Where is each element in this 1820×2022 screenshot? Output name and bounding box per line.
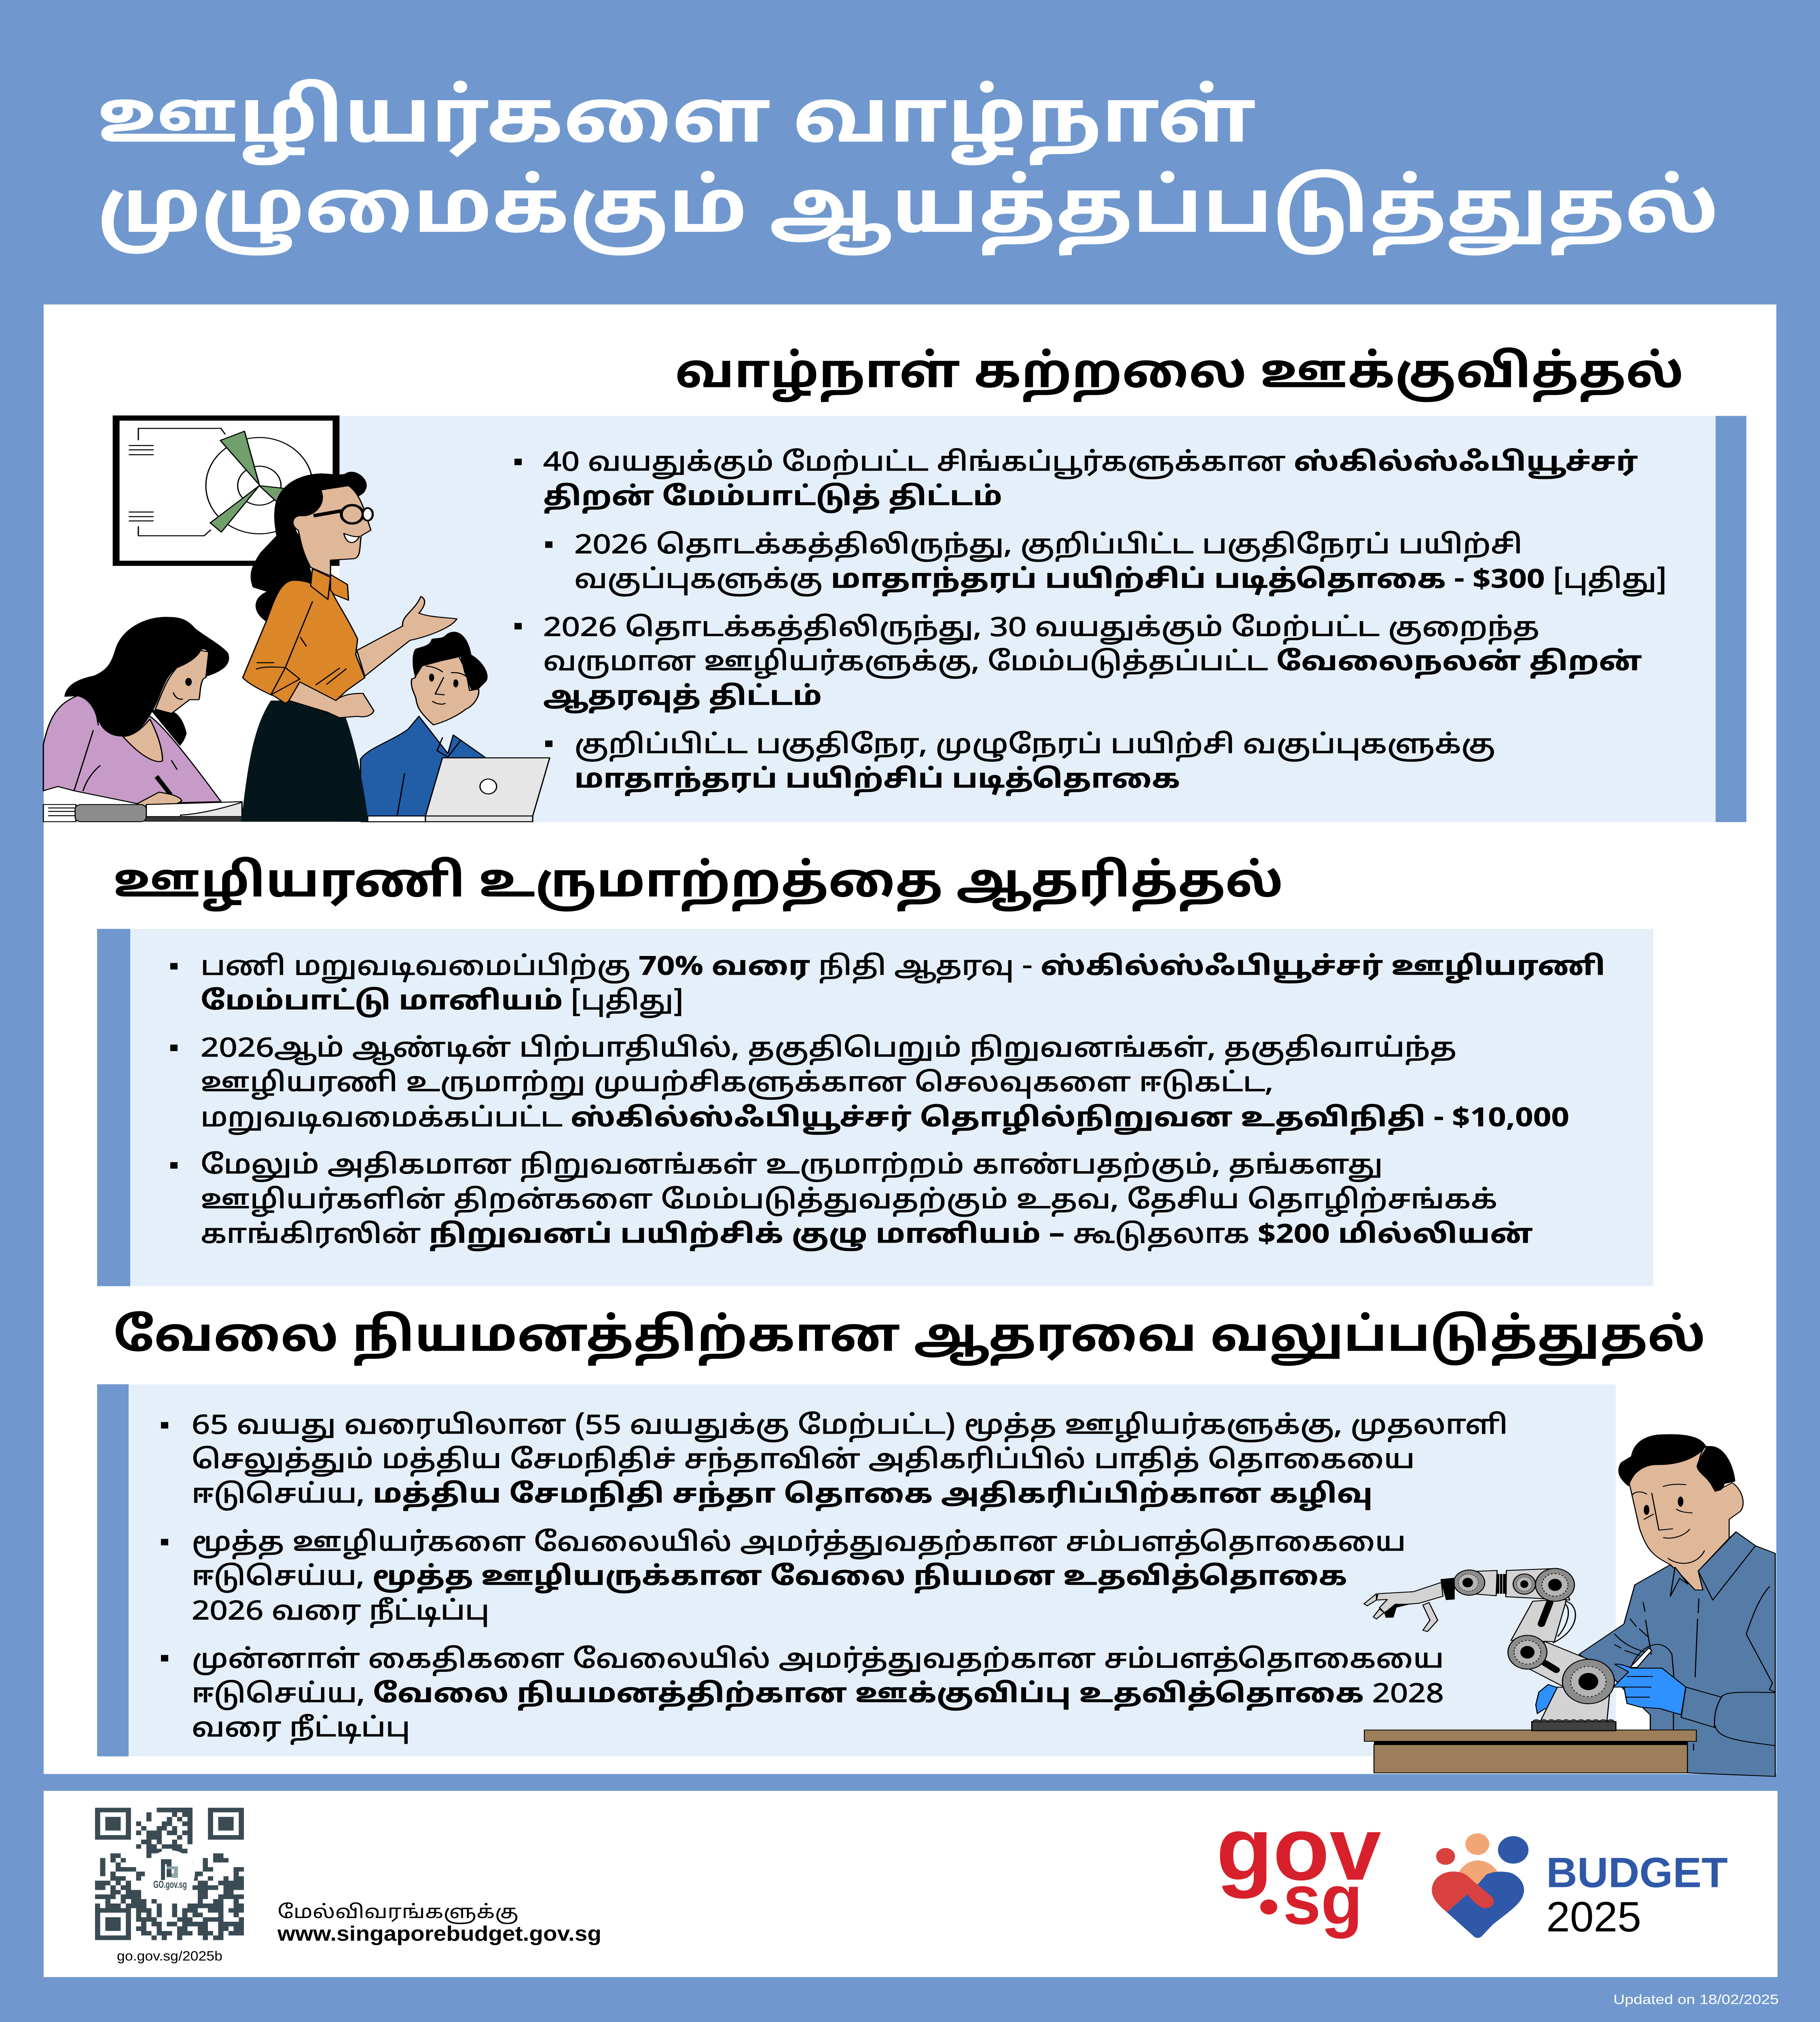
bullet list: lifelong learning: 40 வயதுக்கும் மேற்பட்ட சிங்கப்பூர்களுக்கான ஸ்கில்ஸ்ஃபியூச்சர் xyxy=(543,448,1638,480)
title: முழுமைக்கும் ஆயத்தப்படுத்துதல் xyxy=(97,168,1719,259)
footer: more information link: மேல்விவரங்களுக்கு xyxy=(277,1902,518,1925)
robot arm xyxy=(1364,1569,1616,1731)
gloved hands xyxy=(1613,1648,1775,1746)
bullet list: lifelong learning: 2026 தொடக்கத்திலிருந்து, 30 வயதுக்கும் மேற்பட்ட குறைந்த xyxy=(543,613,1539,646)
footer: QR code: go.gov.sg/2025b xyxy=(117,1949,222,1964)
heading: lifelong learning: வாழ்நாள் கற்றலை ஊக்குவித்தல் xyxy=(675,347,1684,405)
update date: Updated on 18/02/2025 xyxy=(1613,1992,1779,2007)
panel accent bar xyxy=(97,1384,129,1756)
footer: more information link: www.singaporebudget.gov.sg xyxy=(277,1922,601,1945)
whiteboard xyxy=(113,415,339,566)
footer: QR code: GO.gov.sg xyxy=(153,1879,187,1890)
bullet list: job placement support: ஈடுசெய்ய, மூத்த ஊழியருக்கான வேலை நியமன உதவித்தொகை xyxy=(192,1562,1347,1595)
illustration: three colleagues at a meeting xyxy=(43,415,550,822)
title: ஊழியர்களை வாழ்நாள் xyxy=(97,77,1256,169)
main white panel xyxy=(44,305,1776,1774)
bullet list: job placement support: முன்னாள் கைதிகளை வேலையில் அமர்த்துவதற்கான சம்பளத்தொகையை xyxy=(192,1645,1444,1677)
text: BUDGET 2025: 2025 xyxy=(1546,1893,1641,1941)
bullet list: workforce transformation: பணி மறுவடிவமைப்பிற்கு 70% வரை நிதி ஆதரவு - ஸ்கில்ஸ்ஃபியூச்சர் ஊழியரணி xyxy=(201,952,1605,985)
bullet list: workforce transformation xyxy=(170,952,1605,1252)
panel accent bar xyxy=(97,929,130,1286)
bullet list: job placement support: ஈடுசெய்ய, மத்திய சேமநிதி சந்தா தொகை அதிகரிப்பிற்கான கழிவு xyxy=(192,1480,1373,1512)
logo: gov.sg: gov xyxy=(1216,1799,1381,1899)
logo: gov.sg xyxy=(1216,1799,1381,1939)
logo: gov.sg: sg xyxy=(1283,1861,1363,1939)
panel accent bar xyxy=(1716,416,1746,822)
bullet list: job placement support: 65 வயது வரையிலான (55 வயதுக்கு மேற்பட்ட) மூத்த ஊழியர்களுக்கு, முதலாளி xyxy=(192,1411,1508,1443)
heading: job placement support: வேலை நியமனத்திற்கான ஆதரவை வலுப்படுத்துதல் xyxy=(113,1310,1706,1368)
bullet list: workforce transformation: காங்கிரஸின் நிறுவனப் பயிற்சிக் குழு மானியம் – கூடுதலாக $200 மில்லியன் xyxy=(201,1220,1533,1252)
bullet list: lifelong learning: ஆதரவுத் திட்டம் xyxy=(543,682,822,715)
bullet list: job placement support: மூத்த ஊழியர்களை வேலையில் அமர்த்துவதற்கான சம்பளத்தொகையை xyxy=(192,1528,1406,1561)
desk items: book and paper xyxy=(43,802,242,822)
panel background: workforce transformation xyxy=(97,929,1653,1286)
bullet list: job placement support: 2026 வரை நீட்டிப்பு xyxy=(192,1597,489,1629)
bullet list: lifelong learning xyxy=(514,448,1667,797)
bullet list: workforce transformation: மேலும் அதிகமான நிறுவனங்கள் உருமாற்றம் காண்பதற்கும், தங்களது xyxy=(201,1151,1383,1183)
bullet list: job placement support: செலுத்தும் மத்திய சேமநிதிச் சந்தாவின் அதிகரிப்பில் பாதித் தொகையை xyxy=(192,1445,1415,1478)
section: workforce transformation xyxy=(97,856,1653,1286)
illustration: man working with robot arm xyxy=(1364,1434,1775,1777)
bullet list: lifelong learning: திறன் மேம்பாட்டுத் திட்டம் xyxy=(543,482,1002,515)
bullet list: job placement support: வரை நீட்டிப்பு xyxy=(192,1713,410,1746)
bullet list: lifelong learning: வகுப்புகளுக்கு மாதாந்தரப் பயிற்சிப் படித்தொகை - $300 [புதிது] xyxy=(574,565,1667,598)
bullet list: job placement support: ஈடுசெய்ய, வேலை நியமனத்திற்கான ஊக்குவிப்பு உதவித்தொகை 2028 xyxy=(192,1679,1444,1712)
text: BUDGET 2025: BUDGET xyxy=(1546,1849,1728,1896)
footer: more information link xyxy=(277,1902,601,1945)
title xyxy=(97,77,1719,259)
bullet list: workforce transformation: ஊழியரணி உருமாற்று முயற்சிகளுக்கான செலவுகளை ஈடுகட்ட, xyxy=(201,1068,1273,1101)
bullet list: workforce transformation: மறுவடிவமைக்கப்பட்ட ஸ்கில்ஸ்ஃபியூச்சர் தொழில்நிறுவன உதவிநிதி - $10,000 xyxy=(201,1104,1569,1136)
section: job placement support xyxy=(97,1310,1706,1756)
bullet list: workforce transformation: மேம்பாட்டு மானியம் [புதிது] xyxy=(201,987,684,1019)
bullet list: lifelong learning: குறிப்பிட்ட பகுதிநேர, முழுநேரப் பயிற்சி வகுப்புகளுக்கு xyxy=(574,730,1495,763)
bullet list: lifelong learning: மாதாந்தரப் பயிற்சிப் படித்தொகை xyxy=(574,765,1180,797)
panel background: lifelong learning xyxy=(339,416,1716,822)
bullet list: workforce transformation: 2026ஆம் ஆண்டின் பிற்பாதியில், தகுதிபெறும் நிறுவனங்கள், தகுதிவாய்ந்த xyxy=(201,1034,1456,1066)
seated man with laptop xyxy=(360,632,550,822)
panel background: job placement support xyxy=(97,1384,1616,1756)
bullet list: workforce transformation: ஊழியர்களின் திறன்களை மேம்படுத்துவதற்கும் உதவ, தேசிய தொழிற்சங்கக் xyxy=(201,1185,1497,1218)
heading: workforce transformation: ஊழியரணி உருமாற்றத்தை ஆதரித்தல் xyxy=(113,856,1283,914)
section: lifelong learning xyxy=(43,347,1746,822)
bullet list: job placement support xyxy=(161,1411,1508,1746)
bullet list: lifelong learning: 2026 தொடக்கத்திலிருந்து, குறிப்பிட்ட பகுதிநேரப் பயிற்சி xyxy=(574,531,1522,563)
bullet list: lifelong learning: வருமான ஊழியர்களுக்கு, மேம்படுத்தப்பட்ட வேலைநலன் திறன் xyxy=(543,647,1642,680)
table xyxy=(1364,1730,1696,1773)
text: BUDGET 2025 xyxy=(1546,1849,1728,1941)
seated woman xyxy=(43,618,229,811)
logo: Budget 2025 heart xyxy=(1432,1833,1528,1938)
man xyxy=(1579,1434,1775,1777)
footer: QR code xyxy=(95,1808,244,1964)
standing woman presenting xyxy=(241,472,457,822)
footer white panel xyxy=(44,1791,1778,1977)
